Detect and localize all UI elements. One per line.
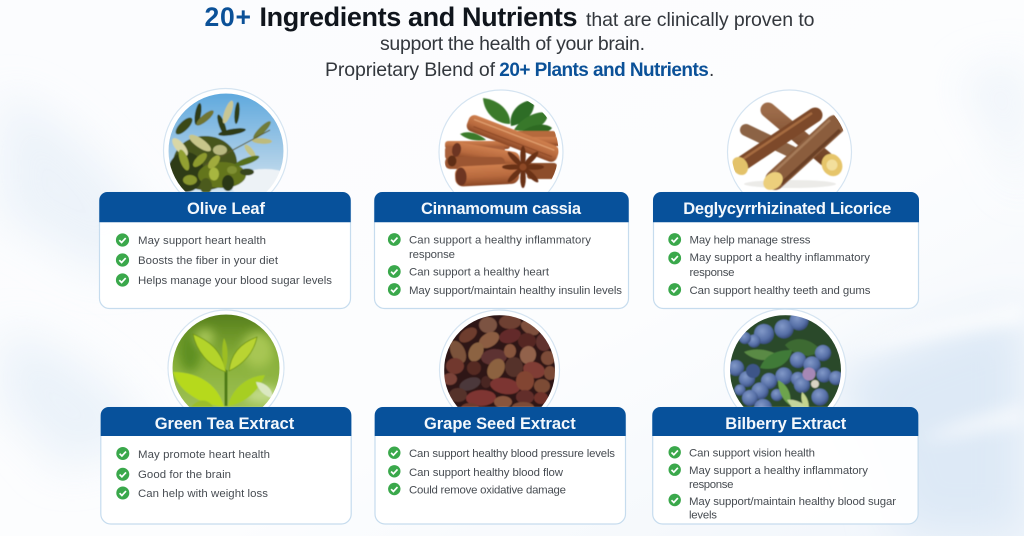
title: support the health of your brain. xyxy=(380,33,645,55)
benefit: Good for the brain xyxy=(138,469,231,481)
photo: bilberries xyxy=(724,309,846,407)
benefit: May help manage stress xyxy=(690,234,811,246)
header: Olive Leaf: Olive Leaf xyxy=(187,200,266,218)
header: Green Tea Extract: Green Tea Extract xyxy=(155,415,295,433)
photo: licorice root sticks xyxy=(727,89,852,192)
benefit: May support heart health xyxy=(138,235,266,247)
title: . xyxy=(709,60,714,81)
title: that are clinically proven to xyxy=(586,9,815,31)
benefit xyxy=(388,233,591,261)
photo: grape seeds xyxy=(439,310,560,407)
title: 20+ xyxy=(204,2,251,32)
header: Deglycyrrhizinated Licorice: Deglycyrrhizinated Licorice xyxy=(683,200,891,218)
header: Bilberry Extract xyxy=(652,407,918,436)
benefit: May promote heart health xyxy=(138,449,270,461)
card: Grape Seed Extract xyxy=(375,407,626,524)
photo: green tea leaves xyxy=(168,310,284,407)
benefit: May support a healthy inflammatory xyxy=(689,465,868,477)
header: Bilberry Extract: Bilberry Extract xyxy=(725,415,847,433)
title: 20+ Plants and Nutrients xyxy=(499,60,709,81)
benefit: levels xyxy=(689,510,717,522)
benefit: Can support healthy blood flow xyxy=(409,467,564,479)
benefit xyxy=(668,252,870,279)
header: Grape Seed Extract: Grape Seed Extract xyxy=(424,415,576,433)
benefit: May support/maintain healthy insulin levels xyxy=(409,285,622,297)
benefit: Can support a healthy inflammatory xyxy=(409,234,591,246)
benefit: May support/maintain healthy blood sugar xyxy=(689,496,896,508)
photo: cinnamon sticks and star anise xyxy=(438,89,564,192)
benefit: Can support healthy blood pressure levels xyxy=(409,448,615,460)
benefit: Can support vision health xyxy=(689,448,815,460)
benefit xyxy=(668,494,896,522)
title: Proprietary Blend of xyxy=(325,59,496,81)
benefit: response xyxy=(690,267,734,279)
benefit: response xyxy=(409,249,455,261)
benefit: Helps manage your blood sugar levels xyxy=(138,275,332,287)
title xyxy=(204,2,815,81)
header: Green Tea Extract xyxy=(101,407,351,436)
card: Green Tea Extract xyxy=(101,407,351,524)
header: Cinnamomum cassia: Cinnamomum cassia xyxy=(421,200,582,218)
header: Olive Leaf xyxy=(99,192,351,222)
benefit: Can support a healthy heart xyxy=(409,266,550,278)
card: Olive Leaf xyxy=(99,192,351,308)
header: Deglycyrrhizinated Licorice xyxy=(653,192,919,222)
benefit: Can help with weight loss xyxy=(138,488,268,500)
benefit: May support a healthy inflammatory xyxy=(690,252,870,264)
benefit: response xyxy=(689,479,734,491)
benefit: Can support healthy teeth and gums xyxy=(690,285,871,297)
benefit xyxy=(668,464,868,491)
benefit: Could remove oxidative damage xyxy=(409,484,566,496)
header: Grape Seed Extract xyxy=(375,407,626,436)
card: Deglycyrrhizinated Licorice xyxy=(653,192,919,308)
title: Ingredients and Nutrients xyxy=(260,2,578,32)
benefit: Boosts the fiber in your diet xyxy=(138,255,279,267)
photo: olive leaf xyxy=(163,88,288,192)
card: Cinnamomum cassia xyxy=(374,192,629,308)
card: Bilberry Extract xyxy=(652,407,918,524)
header: Cinnamomum cassia xyxy=(374,192,629,222)
